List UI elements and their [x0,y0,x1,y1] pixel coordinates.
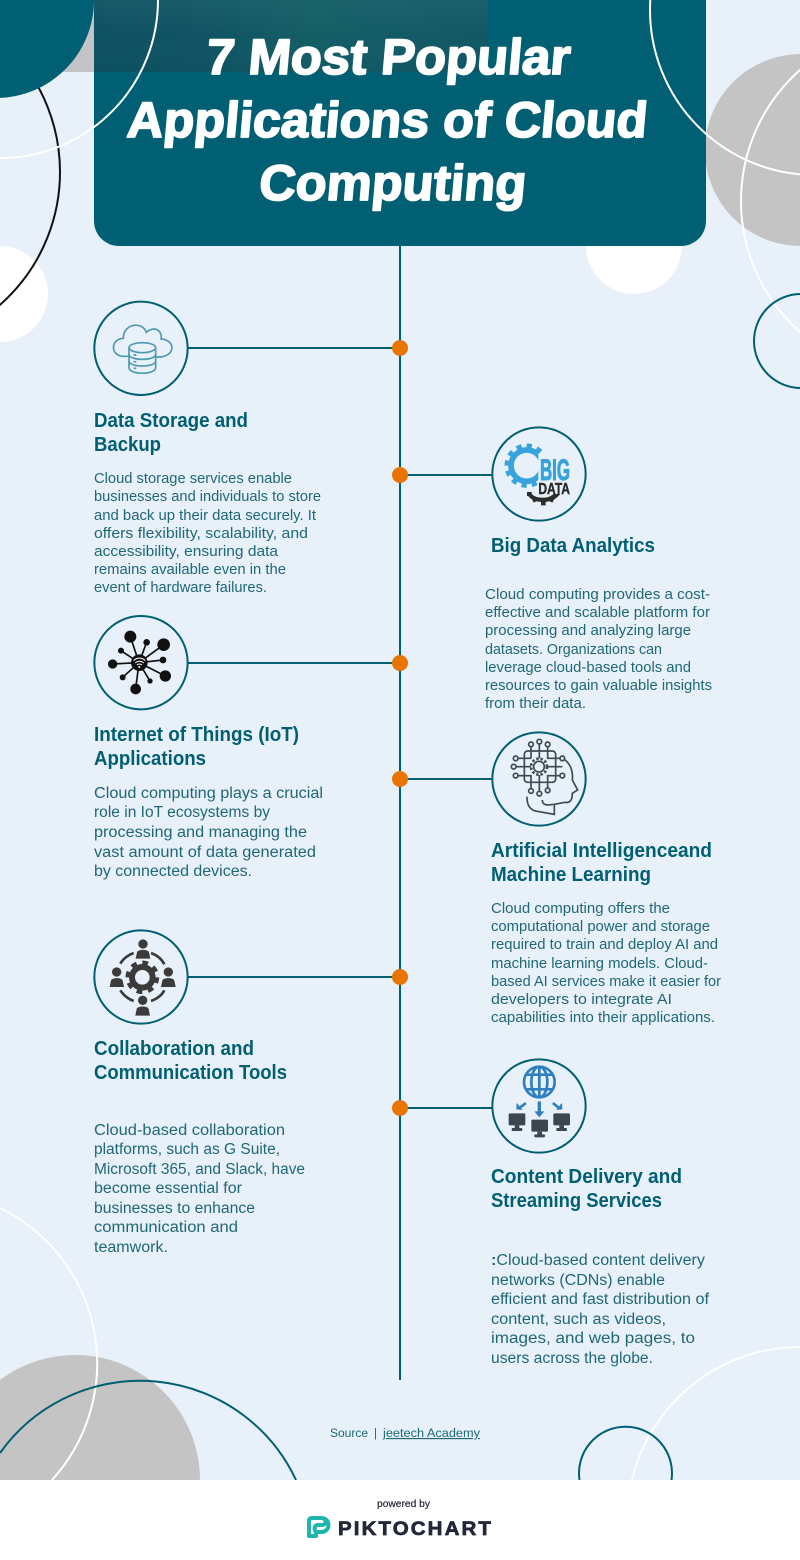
text: content delivery: networks (CDNs) enable [491,1272,665,1289]
text: AI: Cloud computing offers the [491,901,670,917]
text: data storage: businesses and individuals to store [94,489,321,505]
piktochart logo mark [309,1518,328,1536]
heading: IoT: Applications [94,748,206,770]
text: AI: required to train and deploy AI and [491,937,718,953]
heading: IoT [94,724,299,770]
heading: IoT: Internet of Things (IoT) [94,724,299,746]
source line: Source [330,1428,368,1440]
heading: big data: Big Data Analytics [491,535,655,557]
heading: collaboration: Communication Tools [94,1062,287,1084]
text: IoT: by connected devices. [94,863,252,880]
text: big data: resources to gain valuable insights [485,678,712,694]
icon: IoT network [94,616,188,709]
text: data storage: event of hardware failures. [94,580,267,596]
text: content delivery: users across the globe. [491,1350,653,1367]
text: IoT: role in IoT ecosystems by [94,804,270,821]
text: big data: from their data. [485,696,586,712]
text: data storage: and back up their data securely. It [94,508,316,524]
source line: | [374,1428,377,1440]
text: big data: leverage cloud-based tools and [485,660,691,676]
icon: cloud database [94,302,188,395]
text: content delivery: images, and web pages, to [491,1330,695,1347]
piktochart wordmark: PIKTOCHART [338,1518,493,1540]
text: IoT: processing and managing the [94,824,307,841]
heading: data storage: Backup [94,434,161,456]
text: big data [485,587,712,712]
icon: team and gear [94,930,188,1024]
text: big data: processing and analyzing large [485,623,691,639]
text: data storage: Cloud storage services enable [94,471,292,487]
title: Computing [257,155,529,211]
source line [330,1428,480,1440]
heading: data storage [94,410,248,456]
text: IoT [94,785,323,880]
heading: AI: Machine Learning [491,864,651,886]
icon: big data: BIG [540,454,570,487]
text: content delivery: efficient and fast distribution of [491,1291,710,1308]
text: collaboration: platforms, such as G Suite, [94,1141,280,1158]
heading: data storage: Data Storage and [94,410,248,432]
text: AI: computational power and storage [491,919,710,935]
decorative background shapes at bottom [0,1208,800,1480]
footer [0,1480,800,1560]
title [125,29,650,211]
heading: AI [491,840,712,886]
text: collaboration: Cloud-based collaboration [94,1122,285,1139]
heading: content delivery [491,1166,682,1212]
title: Applications of Cloud [125,92,650,148]
text: AI: machine learning models. Cloud- [491,956,708,972]
icon: big data: DATA [538,481,570,498]
text: data storage: remains available even in the [94,562,286,578]
text: collaboration: teamwork. [94,1239,168,1256]
heading: content delivery: Streaming Services [491,1190,662,1212]
text: big data: Cloud computing provides a cost- [485,587,710,603]
text: AI: based AI services make it easier for [491,974,721,990]
timeline [188,246,492,1380]
text: AI: developers to integrate AI [491,992,672,1008]
icon: AI head [492,732,586,826]
text: collaboration: Microsoft 365, and Slack, have [94,1161,305,1178]
text: content delivery: :Cloud-based content delivery [491,1252,705,1269]
icon: globe and monitors [492,1059,586,1153]
decorative background shapes behind header [0,0,800,388]
header panel [0,0,800,246]
heading: collaboration: Collaboration and [94,1038,254,1060]
text: collaboration [94,1122,305,1256]
text: data storage: accessibility, ensuring data [94,544,279,560]
powered by label: powered by [377,1498,431,1510]
text: data storage [94,471,321,596]
text: collaboration: communication and [94,1219,238,1236]
text: collaboration: businesses to enhance [94,1200,255,1217]
text: IoT: vast amount of data generated [94,844,316,861]
title: 7 Most Popular [204,29,573,85]
text: data storage: offers flexibility, scalability, and [94,526,308,542]
heading: collaboration [94,1038,287,1084]
text: content delivery: content, such as videos, [491,1311,666,1328]
text: collaboration: become essential for [94,1180,242,1197]
text: content delivery [491,1252,710,1367]
text: big data: effective and scalable platform for [485,605,710,621]
icon: big data [492,427,586,521]
heading: AI: Artificial Intelligenceand [491,840,712,862]
text: AI [491,901,721,1026]
source line: jeetech Academy [382,1428,480,1440]
text: big data: datasets. Organizations can [485,642,662,658]
text: AI: capabilities into their applications. [491,1010,715,1026]
heading: content delivery: Content Delivery and [491,1166,682,1188]
text: IoT: Cloud computing plays a crucial [94,785,323,802]
